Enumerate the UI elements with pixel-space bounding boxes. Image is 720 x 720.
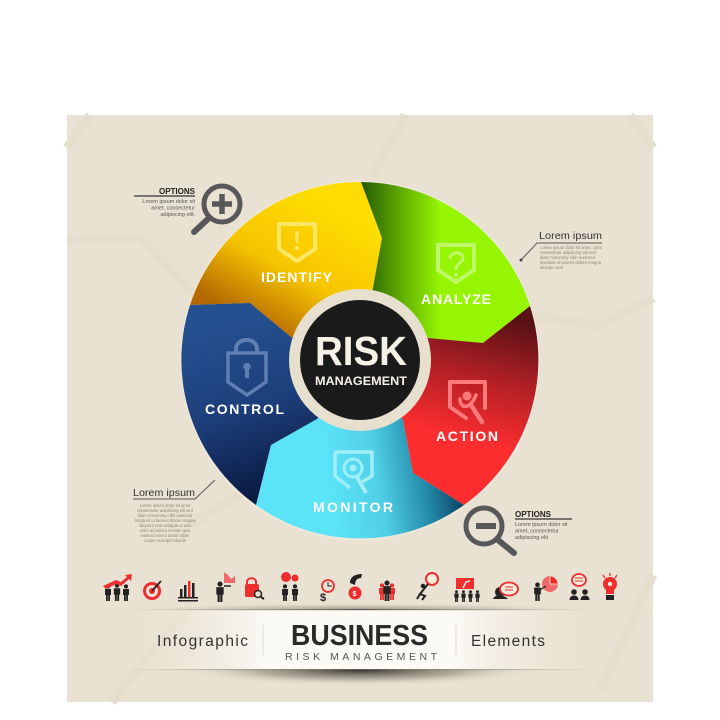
icon: two people with bubble [570, 574, 590, 600]
text: infographic: Infographic [157, 633, 248, 650]
label: action: ACTION [436, 428, 498, 444]
callout: lorem ipsum bottom left: enim ad minim veniam quis [140, 528, 190, 533]
segment: identify [190, 182, 382, 360]
icon: target [144, 581, 161, 598]
callout: options bottom right: Lorem ipsum dolor sit [515, 522, 568, 528]
text: risk management: RISK MANAGEMENT [285, 651, 438, 663]
callout: options bottom right [515, 510, 572, 541]
callout: options top left [134, 187, 196, 218]
callout: lorem ipsum bottom left: consectetur adipiscing elit sed [137, 508, 194, 513]
icon: clock and dollar [320, 580, 334, 604]
icon: money bag: $ [352, 591, 356, 598]
magnifier: minus [466, 508, 514, 553]
callout: lorem ipsum bottom left: Lorem ipsum [133, 487, 195, 499]
text: business: BUSINESS [291, 620, 428, 652]
callout: options bottom right: OPTIONS [515, 510, 552, 519]
icon: monitor badge [335, 452, 372, 493]
callout: options top left: OPTIONS [159, 187, 196, 196]
label: monitor: MONITOR [313, 499, 393, 515]
icon: analyze shield [438, 245, 474, 282]
icon: group of three [379, 581, 395, 601]
callout: lorem ipsum bottom left: diam nonummy nibh euismod [138, 513, 193, 518]
title: risk: RISK [315, 328, 407, 374]
text: elements: Elements [471, 633, 545, 650]
background panel [67, 115, 653, 702]
callout: lorem ipsum top right [520, 230, 602, 270]
circular diagram [180, 180, 540, 540]
icon: bar chart [178, 581, 198, 602]
callout: lorem ipsum top right: tincidunt ut laoreet dolore magna [540, 260, 602, 265]
icon: control padlock [228, 340, 266, 395]
magnifier: plus [194, 186, 240, 232]
center hub [289, 289, 431, 431]
callout: options bottom right: adipiscing elit [515, 535, 548, 541]
callout: lorem ipsum bottom left: nostrud exerci tation ullam [141, 533, 190, 538]
callout: lorem ipsum top right: diam nonummy nibh euismod [540, 255, 595, 260]
callout: lorem ipsum top right: Lorem ipsum dolor sit amet, cons [540, 245, 602, 250]
icon: padlock with magnifier [245, 578, 264, 599]
title: management: MANAGEMENT [315, 374, 408, 388]
callout: lorem ipsum top right: consectetur adipiscing elit sed [540, 250, 597, 255]
icon: running with magnifier [417, 573, 438, 600]
label: identify: IDENTIFY [261, 269, 333, 285]
icon: team with rising arrow [103, 574, 132, 601]
icon: people with gears [281, 572, 298, 601]
icon: presenter with pie chart [534, 576, 558, 601]
callout: options bottom right: amet, consectetur [515, 528, 559, 534]
callout: lorem ipsum top right: aliquam erat [540, 265, 564, 270]
icon row [103, 572, 617, 604]
label: analyze: ANALYZE [421, 291, 491, 307]
callout: options top left: Lorem ipsum dolor sit [142, 199, 195, 205]
banner [143, 604, 578, 684]
segment: action [360, 306, 538, 505]
callout: lorem ipsum bottom left: aliquam erat volutpat ut wisi [139, 523, 191, 528]
callout: lorem ipsum bottom left [133, 480, 215, 543]
segment: control [181, 303, 360, 505]
callout: options top left: amet, consectetur [151, 206, 195, 212]
icon: money bag [348, 574, 362, 600]
callout: lorem ipsum top right: Lorem ipsum [539, 230, 602, 242]
icon: clock and dollar: $ [320, 592, 326, 604]
icon: person with speech bubble [493, 582, 518, 599]
icon: light bulb [603, 573, 617, 600]
label: control: CONTROL [205, 401, 284, 417]
icon: presenter with chart [216, 572, 235, 602]
callout: lorem ipsum bottom left: corper suscipit lobortis [144, 538, 186, 543]
icon: audience with screen [454, 578, 480, 602]
segment: analyze [360, 182, 530, 360]
icon: action badge [450, 382, 485, 422]
icon: identify shield [279, 224, 315, 261]
callout: lorem ipsum bottom left: Lorem ipsum dolor sit amet [140, 503, 191, 508]
callout: options top left: adipiscing elit. [160, 212, 195, 218]
callout: lorem ipsum bottom left: tincidunt ut laoreet dolore magna [134, 518, 196, 523]
segment: monitor [256, 360, 464, 538]
